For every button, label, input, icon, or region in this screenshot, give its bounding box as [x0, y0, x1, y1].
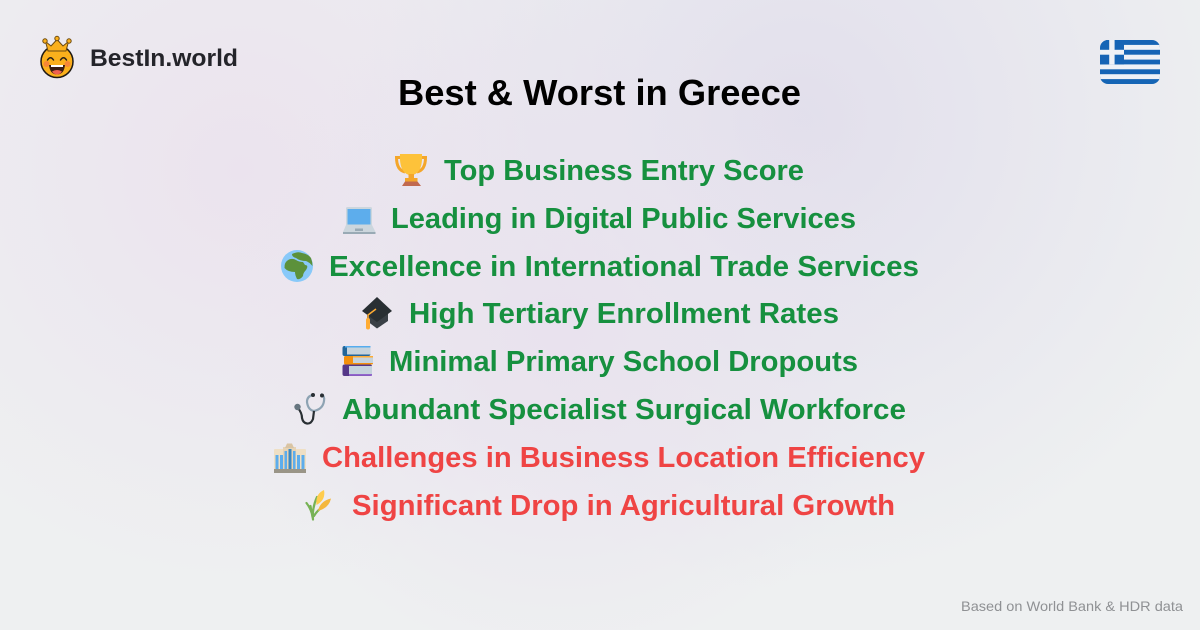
label: Top Business Entry Score	[444, 155, 804, 187]
title: Best & Worst in Greece	[398, 72, 801, 113]
icon: graduation cap	[362, 297, 392, 330]
label: Significant Drop in Agricultural Growth	[352, 490, 895, 522]
row: Significant Drop in Agricultural Growth	[306, 490, 895, 522]
row: High Tertiary Enrollment Rates	[362, 297, 839, 330]
list: best and worst rankings	[274, 154, 925, 522]
label: High Tertiary Enrollment Rates	[409, 298, 839, 330]
brand name: BestIn.world	[90, 45, 238, 72]
icon: Greek flag	[1100, 40, 1160, 84]
icon: office building	[274, 444, 306, 473]
row: Challenges in Business Location Efficiency	[274, 442, 925, 474]
label: Minimal Primary School Dropouts	[389, 346, 858, 378]
row: Top Business Entry Score	[396, 154, 804, 187]
logo: BestIn.world	[41, 36, 238, 78]
icon: stethoscope	[294, 393, 324, 424]
icon: laptop	[343, 207, 376, 234]
icon: ear of rice	[306, 490, 331, 520]
icon: crown smiley	[41, 36, 73, 78]
row: Abundant Specialist Surgical Workforce	[294, 393, 906, 426]
label: Leading in Digital Public Services	[391, 203, 856, 235]
icon: books	[342, 346, 373, 376]
label: Abundant Specialist Surgical Workforce	[342, 394, 906, 426]
row: Excellence in International Trade Services	[281, 250, 919, 283]
row: Minimal Primary School Dropouts	[342, 346, 858, 378]
row: Leading in Digital Public Services	[343, 203, 856, 235]
label: Excellence in International Trade Services	[329, 251, 919, 283]
source note: Based on World Bank & HDR data	[961, 598, 1183, 614]
icon: trophy	[396, 154, 426, 186]
label: Challenges in Business Location Efficiency	[322, 442, 925, 474]
icon: globe	[281, 250, 313, 282]
